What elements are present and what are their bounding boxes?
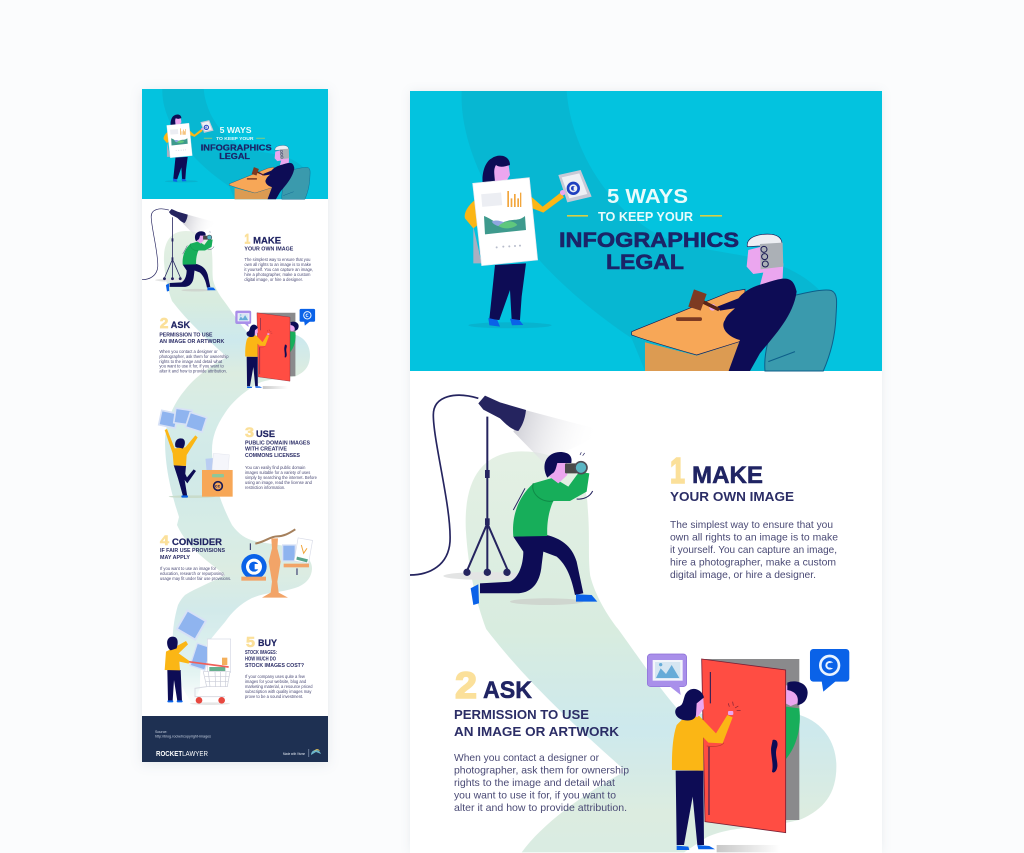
body text: it yourself. You can capture an image, — [670, 544, 837, 556]
small infographic: step 3 text: COMMONS LICENSES — [245, 453, 301, 459]
small infographic: step 4 text: 4 — [160, 532, 169, 548]
small infographic: step 4 text: IF FAIR USE PROVISIONS — [160, 548, 226, 554]
small infographic: step 1 text: MAKE — [253, 235, 281, 246]
small infographic: title: LEGAL — [219, 152, 250, 161]
small infographic: step 3 text: You can easily find public domain — [245, 465, 306, 470]
small infographic: step 2 text: 2 — [160, 316, 168, 332]
numeral 1: 1 — [670, 450, 685, 491]
step 2 illustration: woman knocking at door — [647, 649, 849, 852]
small infographic: step 2 text: AN IMAGE OR ARTWORK — [159, 339, 225, 345]
body text: you want to use it for, if you want to — [454, 790, 616, 802]
title — [559, 186, 739, 274]
small infographic: step 1 text — [244, 231, 313, 282]
small infographic: step 3 illustration: cc — [215, 484, 221, 489]
numeral 2: 2 — [455, 665, 477, 706]
small infographic: footer: Source: — [155, 730, 167, 734]
step 1 text — [670, 450, 838, 581]
small infographic: step 4 text: MAY APPLY — [160, 555, 191, 561]
step 2 text — [454, 665, 629, 814]
subheading: permission — [454, 707, 620, 739]
subheading: your own image: YOUR OWN IMAGE — [670, 489, 794, 504]
small infographic: step 3 text: restriction information. — [245, 485, 285, 490]
subheading: permission: PERMISSION TO USE — [454, 707, 589, 722]
small infographic: step 1 text: YOUR OWN IMAGE — [244, 247, 294, 253]
small infographic: step 5 text: prove to be a sound investment. — [245, 694, 303, 699]
body text: digital image, or hire a designer. — [670, 569, 816, 581]
small infographic: step 5 text: BUY — [258, 638, 278, 649]
small infographic: step 4 text: usage may fit under fair use provisions. — [160, 576, 231, 581]
title line: legal: LEGAL — [606, 251, 684, 274]
small infographic: step 3 text: images suitable for a variety of uses — [245, 470, 310, 475]
small infographic: step 1 text: 1 — [244, 231, 250, 247]
body text: When you contact a designer or — [454, 752, 599, 764]
title line: 5 ways: 5 WAYS — [607, 186, 688, 208]
small infographic: header illustration — [162, 89, 310, 199]
body text: The simplest way to ensure that you — [670, 519, 833, 531]
small infographic: step 2 text: alter it and how to provide attribution. — [159, 369, 227, 374]
small infographic: step 3 text: using an image, read the license and — [245, 480, 313, 485]
small infographic: step 4 text: If you want to use an image for — [160, 566, 217, 571]
small infographic: step 3 text: simply by searching the internet. Before — [245, 475, 318, 480]
subheading: permission: AN IMAGE OR ARTWORK — [454, 724, 620, 739]
body text: photographer, ask them for ownership — [454, 764, 629, 776]
small infographic: step 2 text: When you contact a designer or — [159, 349, 218, 354]
small infographic: step 1 text: digital image, or hire a designer. — [244, 277, 303, 282]
small infographic: step 5 text: HOW MUCH DO — [245, 656, 276, 662]
small infographic: step 3 text: 3 — [245, 424, 254, 440]
small infographic: step 5 text: 5 — [246, 634, 255, 651]
small infographic: step 4 text: education, research or repurposing, — [160, 571, 225, 576]
small infographic: step 5 text: images for your website, blog and — [245, 679, 307, 684]
title line: infographics: INFOGRAPHICS — [559, 229, 739, 252]
small infographic: footer — [142, 716, 328, 762]
small infographic: footer: http://blog.rocket/copyright-images — [155, 734, 211, 738]
small infographic: step 2 text: PERMISSION TO USE — [159, 332, 213, 338]
small infographic: title: 5 WAYS — [220, 126, 252, 135]
small infographic: step 3 text: WITH CREATIVE — [245, 447, 288, 453]
step 1 illustration: photographer with studio lamp — [410, 395, 607, 605]
small infographic: step 5 text: subscription with quality images may — [245, 689, 312, 694]
body text — [670, 519, 838, 581]
heading: make: MAKE — [692, 462, 763, 489]
small infographic: step 4 text: CONSIDER — [172, 537, 222, 548]
body text: own all rights to an image is to make — [670, 532, 838, 544]
title line: to keep your: TO KEEP YOUR — [598, 210, 693, 224]
small infographic: step 1 text: The simplest way to ensure that you — [244, 257, 311, 262]
small infographic: step 5 text: STOCK IMAGES: — [245, 650, 277, 656]
small infographic: step 3 text: USE — [256, 429, 275, 440]
small infographic: title: TO KEEP YOUR — [216, 136, 254, 142]
body text: rights to the image and detail what — [454, 777, 615, 789]
heading: ask: ASK — [483, 677, 533, 704]
small infographic: step 1 text: it yourself. You can capture an image, — [244, 267, 313, 272]
body text: hire a photographer, make a custom — [670, 556, 836, 568]
small infographic: step 2 text — [159, 316, 229, 374]
small infographic: step 5 illustration — [165, 610, 231, 705]
small infographic: step 2 text: photographer, ask them for ownership — [159, 354, 229, 359]
small infographic: step 4 text — [160, 532, 231, 581]
header band — [410, 91, 882, 371]
small infographic: step 1 text: own all rights to an image is to make — [244, 262, 312, 267]
small infographic: footer: ROCKETLAWYER — [156, 751, 208, 758]
small infographic: header band — [142, 89, 328, 199]
background swoosh — [466, 451, 836, 852]
small infographic: step 3 text: PUBLIC DOMAIN IMAGES — [245, 440, 311, 446]
small infographic: step 2 text: ASK — [171, 320, 190, 331]
body text — [454, 752, 629, 814]
small infographic: background swoosh — [164, 231, 312, 705]
panel: full infographic preview — [142, 89, 328, 762]
small infographic: step 5 text — [245, 634, 313, 699]
small infographic: step 5 text: marketing material, a resource priced — [245, 684, 313, 689]
small infographic: step 5 text: If your company uses quite a few — [245, 674, 305, 679]
small infographic: footer: Made with Visme — [283, 751, 306, 756]
small infographic: step 1 illustration — [142, 209, 219, 292]
header illustration: presenter and judge — [462, 91, 837, 371]
small infographic: step 2 text: you want to use it for, if you want to — [159, 364, 224, 369]
small infographic: step 3 illustration — [159, 408, 233, 498]
small infographic: title: INFOGRAPHICS — [201, 143, 272, 152]
small infographic: step 5 text: STOCK IMAGES COST? — [245, 663, 304, 669]
body text: alter it and how to provide attribution. — [454, 802, 627, 814]
small infographic: step 2 illustration — [236, 309, 315, 389]
small infographic: step 1 text: hire a photographer, make a custom — [244, 272, 311, 277]
small infographic: step 4 illustration — [241, 529, 313, 598]
small infographic: step 2 text: rights to the image and detail what — [159, 359, 223, 364]
small infographic: title — [201, 126, 272, 161]
small infographic: step 3 text — [245, 424, 318, 490]
panel: zoomed detail of infographic — [410, 91, 882, 853]
